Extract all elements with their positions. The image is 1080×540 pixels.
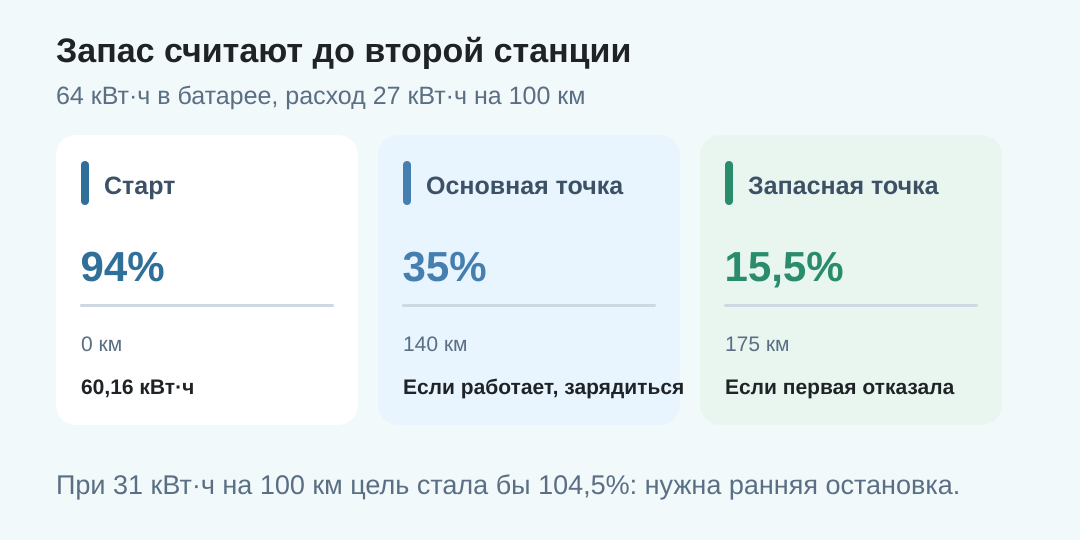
accent bar: main point: [403, 161, 411, 205]
accent bar: backup point: [725, 161, 733, 205]
note: backup point: Если первая отказала: [725, 376, 955, 399]
heading: backup point: Запасная точка: [748, 172, 940, 200]
value: backup point: 15,5%: [724, 243, 844, 290]
title: Запас считают до второй станции: [56, 32, 631, 70]
heading: main point: Основная точка: [426, 172, 624, 200]
subtitle: 64 кВт·ч в батарее, расход 27 кВт·ч на 100 км: [56, 82, 585, 110]
distance: main point: 140 км: [403, 333, 468, 356]
panel: start: [56, 135, 358, 425]
panel: backup point: [700, 135, 1002, 425]
value: main point: 35%: [402, 243, 487, 290]
heading: start: Старт: [104, 172, 175, 200]
footer note: При 31 кВт·ч на 100 км цель стала бы 104,5%: нужна ранняя остановка.: [56, 470, 960, 500]
accent bar: start: [81, 161, 89, 205]
panel: main point: [378, 135, 684, 425]
note: start: 60,16 кВт·ч: [81, 376, 194, 399]
value: start: 94%: [80, 243, 165, 290]
distance: backup point: 175 км: [725, 333, 790, 356]
distance: start: 0 км: [81, 333, 122, 356]
note: main point: Если работает, зарядиться: [403, 376, 684, 399]
